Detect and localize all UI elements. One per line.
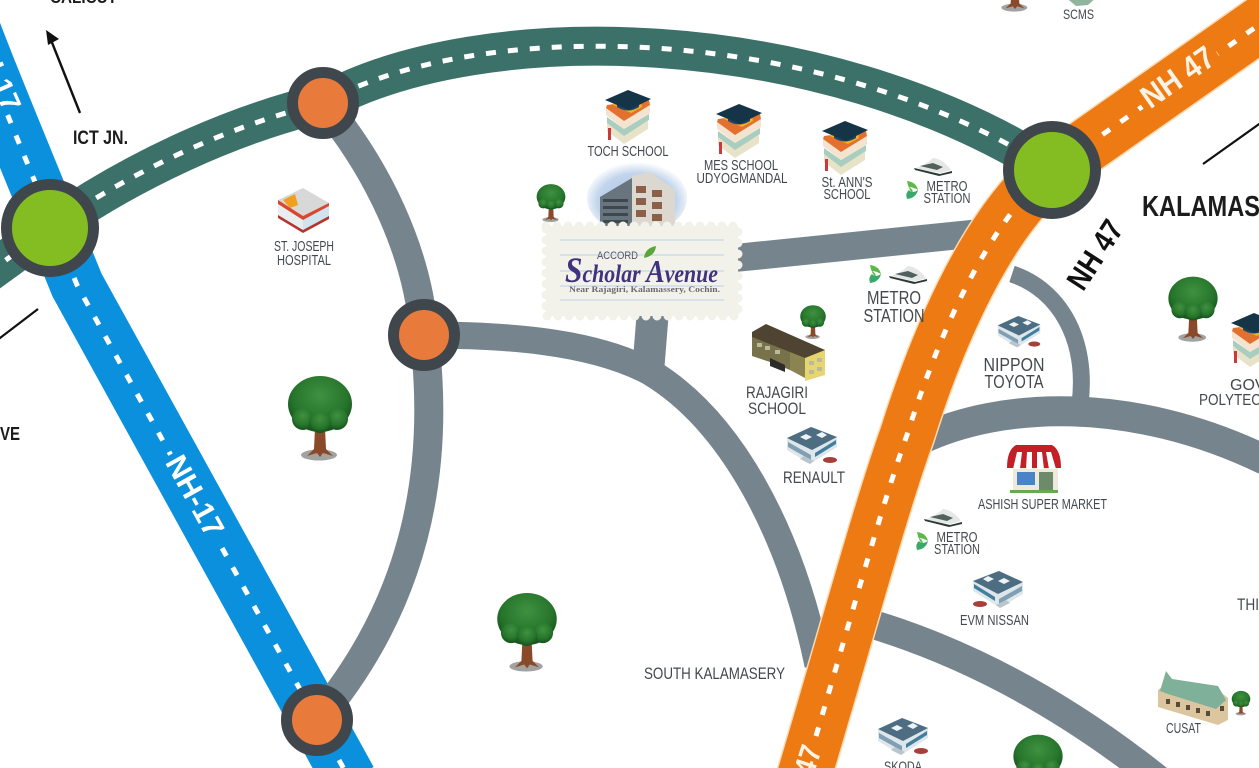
icon: train xyxy=(924,509,962,527)
icon: tree bottom xyxy=(1013,735,1063,768)
icon: showroom xyxy=(973,571,1023,608)
label card xyxy=(546,226,738,316)
Nippon Toyota: TOYOTA xyxy=(984,372,1044,392)
icon: showroom xyxy=(998,316,1040,347)
Metro station 3 xyxy=(916,509,980,558)
icon: hospital xyxy=(278,188,329,233)
label: Nippon Toyota: NIPPON xyxy=(984,355,1044,375)
Skoda xyxy=(878,718,928,768)
label: clipped left: VE xyxy=(0,424,20,444)
road label: NH 47 upper: NH 47 xyxy=(1134,39,1221,115)
junction: west green xyxy=(6,184,94,272)
Metro station 2: STATION xyxy=(864,306,924,326)
label: SCMS: SCMS xyxy=(1063,6,1094,22)
Metro station 3: STATION xyxy=(934,542,980,558)
label: Metro Station: METRO xyxy=(926,179,968,195)
label: EVM Nissan: EVM NISSAN xyxy=(960,613,1029,629)
road: NH-17 xyxy=(0,0,350,768)
logo leaf xyxy=(644,246,656,258)
MES School: UDYOGMANDAL xyxy=(696,171,788,187)
icon: school books xyxy=(822,121,868,175)
icon: tree large xyxy=(288,376,352,460)
road: NH 47 xyxy=(800,3,1259,768)
CUSAT xyxy=(1158,671,1228,737)
road label: NH-17: NH-17 xyxy=(159,450,230,543)
label: Metro Station: METRO xyxy=(867,288,921,308)
Polytechnic xyxy=(1199,313,1259,409)
junction: east green xyxy=(1008,126,1096,214)
icon: showroom xyxy=(878,718,928,755)
icon: school books xyxy=(1231,313,1259,367)
logo text: address: Near Rajagiri, Kalamassery, Cochin. xyxy=(569,284,720,294)
junction: north orange xyxy=(292,72,354,134)
arrow: to Calicut xyxy=(46,30,80,113)
pointer line: left xyxy=(0,309,38,341)
icon: metro logo xyxy=(869,265,881,283)
St. Ann's School: SCHOOL xyxy=(824,187,870,203)
icon: tree top xyxy=(992,0,1038,12)
icon: tree by building xyxy=(537,184,565,222)
label: St. Ann's School: St. ANN'S xyxy=(822,175,872,191)
label: MES School Udyogmandal: MES SCHOOL xyxy=(704,158,778,174)
hospital: HOSPITAL xyxy=(277,253,331,269)
label: NH 47 black: NH 47 xyxy=(1060,213,1130,296)
logo text: Accord: ACCORD xyxy=(597,250,638,262)
MES School xyxy=(696,104,788,187)
Rajagiri School xyxy=(746,324,825,418)
label: CUSAT: CUSAT xyxy=(1166,721,1201,737)
Metro station 2 xyxy=(864,265,927,326)
icon: tree east xyxy=(1168,277,1218,342)
icon: school building xyxy=(752,324,825,381)
icon: showroom xyxy=(787,427,837,464)
Toch School xyxy=(588,90,668,160)
label: St. Joseph Hospital: ST. JOSEPH xyxy=(274,239,334,255)
Ashish Super Market xyxy=(978,445,1107,513)
icon: university building xyxy=(1158,671,1228,725)
Nippon Toyota xyxy=(984,316,1044,392)
St. Ann's School xyxy=(822,121,872,203)
logo text: Scholar Avenue: Scholar Avenue xyxy=(565,250,718,290)
label: Rajagiri School: RAJAGIRI xyxy=(746,383,808,402)
icon: school books xyxy=(716,104,762,158)
icon: train xyxy=(889,266,927,284)
icon: market xyxy=(1007,445,1061,493)
roads: grey local roads xyxy=(317,103,1259,768)
label: Metro Station: METRO xyxy=(936,530,978,546)
road: green ring road xyxy=(0,46,1052,286)
label: South Kalamasery: SOUTH KALAMASERY xyxy=(644,664,785,683)
icon: metro logo xyxy=(916,532,928,550)
pointer line: Kalamassery xyxy=(1203,122,1259,164)
icon: tree by Rajagiri xyxy=(800,305,826,339)
label: Ashish Super Market: ASHISH SUPER MARKET xyxy=(978,497,1107,513)
SCMS xyxy=(1063,0,1098,22)
Metro station 1: STATION xyxy=(924,191,970,207)
icon: metro logo xyxy=(906,181,918,199)
project: Scholar Avenue xyxy=(546,162,738,316)
icon: tree by CUSAT xyxy=(1232,691,1250,715)
icon: tree south xyxy=(497,593,557,672)
hospital xyxy=(274,188,334,269)
icon: train xyxy=(914,158,952,176)
label: Toch School: TOCH SCHOOL xyxy=(588,144,668,160)
label: ICT Jn.: ICT JN. xyxy=(73,128,128,149)
junction: south orange xyxy=(286,690,348,750)
Rajagiri School: SCHOOL xyxy=(748,399,806,418)
EVM Nissan xyxy=(960,571,1029,629)
icon: building xyxy=(1064,0,1098,6)
Metro station 1 xyxy=(906,158,970,207)
junction: middle orange xyxy=(394,304,454,366)
icon: school books xyxy=(605,90,651,144)
Renault xyxy=(783,427,845,487)
building halo and tower xyxy=(587,162,687,234)
label: Renault: RENAULT xyxy=(783,468,845,487)
